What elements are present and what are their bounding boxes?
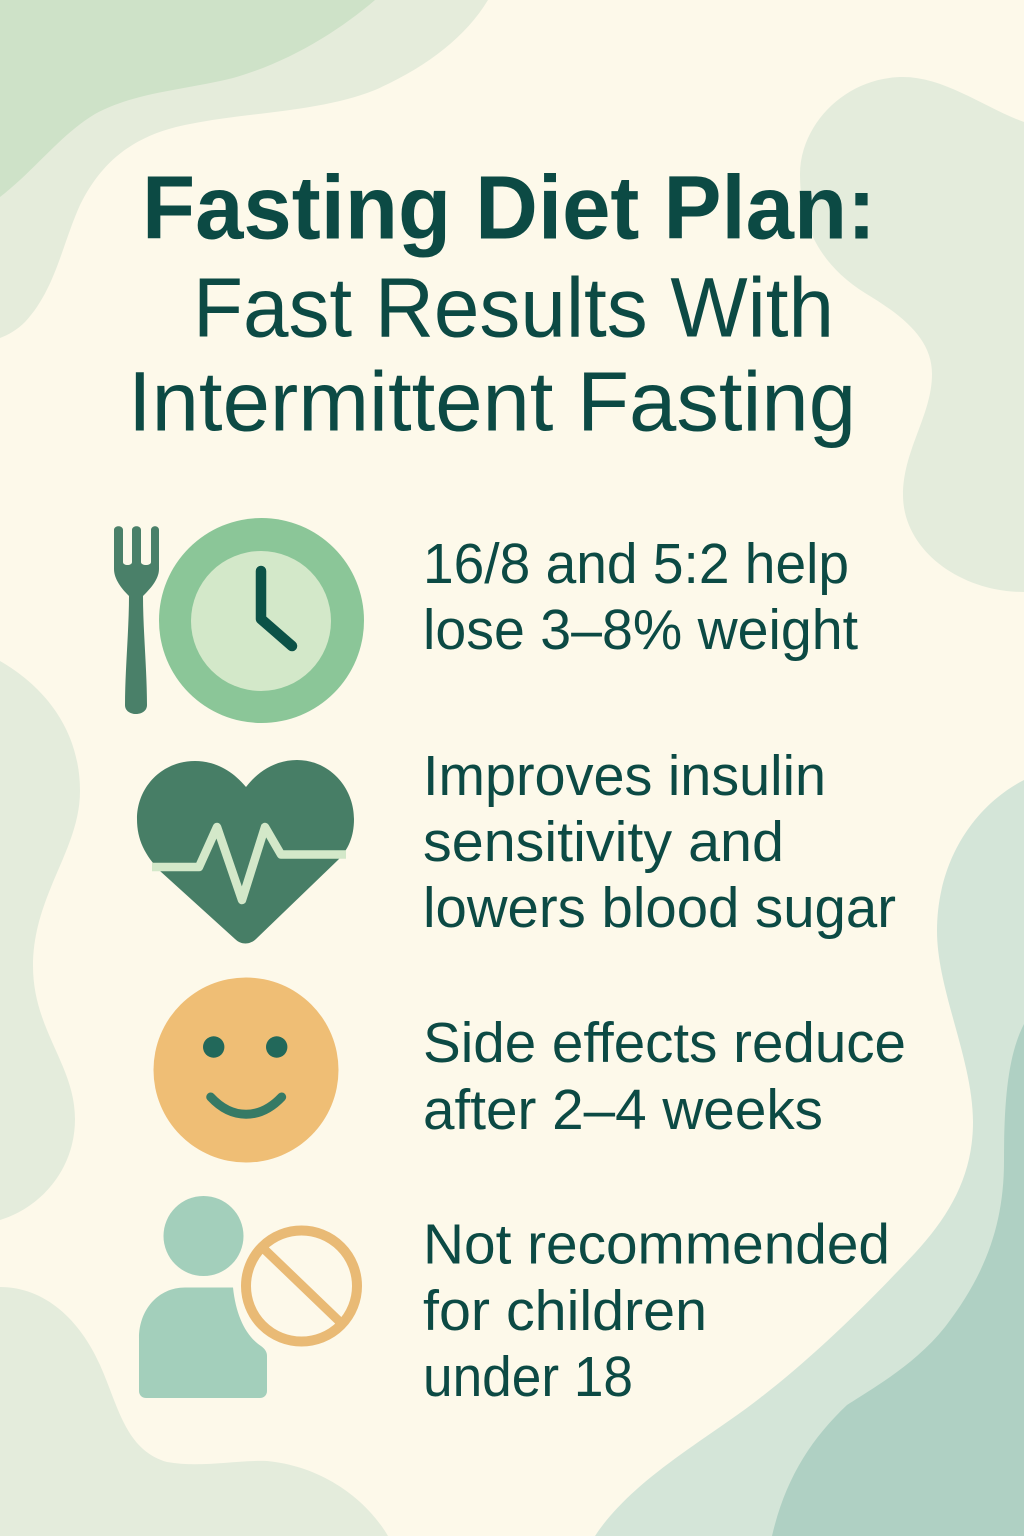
- icon: smiley face: [154, 978, 338, 1162]
- person head: [164, 1196, 244, 1276]
- right eye: [266, 1036, 287, 1058]
- icon: fork and clock plate: [114, 518, 364, 723]
- text: insulin sensitivity: lowers blood sugar: [423, 876, 896, 940]
- text: children warning: [423, 1212, 890, 1409]
- title line 3: Intermittent Fasting: [128, 354, 856, 448]
- person body: [139, 1288, 267, 1398]
- icon: person with prohibition sign: [139, 1196, 357, 1398]
- plate: [159, 518, 364, 723]
- prohibition sign: [246, 1230, 357, 1342]
- text: children warning: Not recommended: [423, 1212, 890, 1276]
- text: children warning: for children: [423, 1279, 707, 1343]
- title line 1: Fasting Diet Plan:: [142, 158, 876, 258]
- pulse line: [152, 827, 346, 900]
- text: weight loss: lose 3–8% weight: [423, 598, 858, 662]
- text: weight loss: [423, 532, 858, 662]
- text: insulin sensitivity: Improves insulin: [423, 744, 826, 808]
- text: side effects: after 2–4 weeks: [423, 1078, 823, 1142]
- text: children warning: under 18: [423, 1345, 633, 1409]
- text: weight loss: 16/8 and 5:2 help: [423, 532, 849, 596]
- text: side effects: [423, 1011, 906, 1142]
- icon: heart with pulse: [137, 760, 354, 944]
- heart: [137, 760, 354, 944]
- title: [128, 158, 876, 448]
- smile: [211, 1097, 282, 1114]
- title line 2: Fast Results With: [193, 260, 834, 354]
- fork: [114, 526, 159, 714]
- left eye: [203, 1036, 224, 1058]
- clock hands: [261, 571, 292, 646]
- text: insulin sensitivity: [423, 744, 896, 940]
- text: insulin sensitivity: sensitivity and: [423, 810, 784, 874]
- face: [154, 978, 338, 1162]
- clock face: [191, 551, 331, 691]
- text: side effects: Side effects reduce: [423, 1011, 906, 1075]
